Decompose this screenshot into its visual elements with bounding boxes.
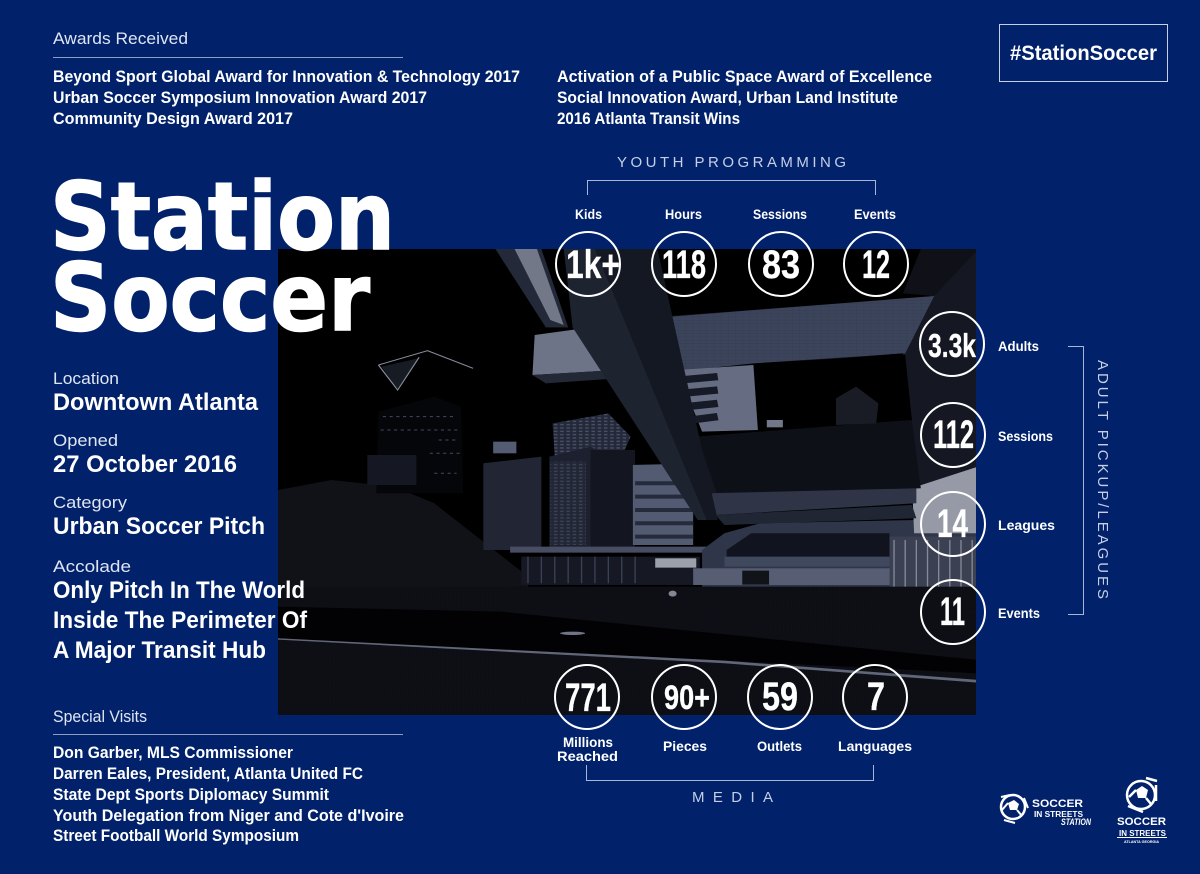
stat: kids bbox=[556, 206, 620, 296]
logo: Soccer in the Streets Station: IN STREETS bbox=[1034, 810, 1084, 819]
fact: accolade: Accolade bbox=[53, 558, 131, 576]
fact: location: Location bbox=[53, 370, 119, 388]
diagonal beam bbox=[590, 249, 718, 520]
media group bbox=[555, 665, 912, 806]
hashtag box bbox=[1000, 24, 1168, 82]
title: Soccer bbox=[50, 244, 371, 353]
stat: hours: 118 bbox=[662, 243, 706, 287]
logo: Soccer in the Streets bbox=[1117, 778, 1167, 844]
adult bracket bbox=[1068, 346, 1084, 614]
awards list: left column: Community Design Award 2017 bbox=[53, 110, 293, 128]
dark tower bbox=[376, 397, 463, 493]
stat: languages: 7 bbox=[867, 675, 885, 719]
awards list: right column bbox=[557, 68, 932, 128]
special visits list: Don Garber, MLS Commissioner bbox=[53, 744, 294, 762]
special visits list: Street Football World Symposium bbox=[53, 827, 299, 845]
fact: category: Category bbox=[53, 494, 128, 512]
logo: Soccer in the Streets: SOCCER bbox=[1117, 816, 1166, 828]
stat: sessions bbox=[749, 206, 813, 296]
logo: Soccer in the Streets: IN STREETS bbox=[1119, 829, 1167, 838]
fact: accolade bbox=[53, 558, 308, 664]
photo dimming bbox=[278, 249, 976, 715]
logo: Soccer in the Streets Station bbox=[1001, 795, 1091, 827]
special visits list: State Dept Sports Diplomacy Summit bbox=[53, 786, 329, 804]
stat: outlets bbox=[748, 665, 812, 754]
title: Station bbox=[50, 163, 395, 272]
canopy underside bbox=[662, 240, 978, 493]
stat: kids: 1k+ bbox=[566, 243, 620, 287]
right pavilion bbox=[702, 520, 976, 587]
stat: pieces: Pieces bbox=[663, 738, 707, 754]
fact: accolade: Inside The Perimeter Of bbox=[53, 607, 308, 634]
fact: opened bbox=[53, 432, 237, 478]
stat: leagues bbox=[921, 492, 1055, 556]
youth bracket bbox=[588, 180, 876, 195]
stat: leagues: 14 bbox=[937, 502, 969, 546]
stat: adults: Adults bbox=[998, 338, 1039, 354]
fact: accolade: Only Pitch In The World bbox=[53, 577, 305, 604]
photo: elevated station at night bbox=[278, 240, 978, 720]
stat: hours bbox=[652, 206, 716, 296]
stat: millions reached: 771 bbox=[565, 676, 611, 720]
fact: location bbox=[53, 370, 259, 416]
stat: kids: Kids bbox=[575, 206, 602, 222]
stat: pieces bbox=[652, 665, 716, 754]
awards heading: Awards Received bbox=[53, 30, 188, 48]
fact: category: Urban Soccer Pitch bbox=[53, 513, 265, 540]
fact: opened: 27 October 2016 bbox=[53, 451, 237, 478]
stat: millions reached bbox=[555, 665, 619, 764]
awards list: left column: Urban Soccer Symposium Innovation Award 2017 bbox=[53, 89, 427, 107]
youth programming group bbox=[556, 154, 908, 296]
awards list: right column: 2016 Atlanta Transit Wins bbox=[557, 110, 740, 128]
awards list: right column: Social Innovation Award, Urban Land Institute bbox=[557, 89, 898, 107]
tower crown bbox=[378, 351, 473, 390]
fact: category bbox=[53, 494, 265, 540]
adult heading: ADULT PICKUP/LEAGUES bbox=[1094, 360, 1111, 599]
stat: events: Events bbox=[854, 206, 896, 222]
awards list: left column: Beyond Sport Global Award for Innovation & Technology 2017 bbox=[53, 68, 520, 86]
stat: adult sessions bbox=[921, 403, 1053, 467]
logo: Soccer in the Streets: ATLANTA GEORGIA bbox=[1124, 839, 1159, 844]
stat: sessions: Sessions bbox=[753, 206, 807, 222]
title bbox=[50, 163, 395, 353]
stat: events bbox=[844, 206, 908, 296]
fact: accolade: A Major Transit Hub bbox=[53, 637, 266, 664]
hashtag box: #StationSoccer bbox=[1010, 42, 1157, 65]
stat: languages: Languages bbox=[838, 738, 912, 754]
stat: millions reached: Reached bbox=[557, 748, 618, 764]
media heading: MEDIA bbox=[692, 789, 773, 806]
stat: millions reached: Millions bbox=[563, 734, 613, 750]
fence and pitch wall bbox=[510, 547, 707, 553]
ground bbox=[278, 587, 978, 720]
special visits list bbox=[53, 744, 404, 845]
adult pickup and leagues group bbox=[920, 312, 1111, 644]
awards list: left column bbox=[53, 68, 520, 128]
stat: outlets: Outlets bbox=[757, 738, 802, 754]
media bracket bbox=[586, 765, 874, 780]
logo: Soccer in the Streets Station: SOCCER bbox=[1032, 798, 1083, 810]
stat: outlets: 59 bbox=[762, 675, 798, 719]
awards list: right column: Activation of a Public Space Award of Excellence bbox=[557, 68, 932, 86]
stat: adult events: Events bbox=[998, 605, 1040, 621]
fact: opened: Opened bbox=[53, 432, 118, 450]
stat: sessions: 83 bbox=[762, 243, 800, 287]
special visits list: Darren Eales, President, Atlanta United FC bbox=[53, 765, 363, 783]
hill bbox=[278, 480, 528, 590]
special visits heading: Special Visits bbox=[53, 708, 147, 726]
stat: adult events bbox=[921, 580, 1040, 644]
stat: adults bbox=[920, 312, 1039, 376]
stat: languages bbox=[838, 665, 912, 754]
youth heading: YOUTH PROGRAMMING bbox=[617, 154, 846, 171]
mid buildings bbox=[483, 457, 541, 550]
stat: adult sessions: Sessions bbox=[998, 428, 1053, 444]
stat: hours: Hours bbox=[665, 206, 702, 222]
stat: events: 12 bbox=[862, 243, 890, 287]
stat: leagues: Leagues bbox=[998, 517, 1055, 533]
stat: adult events: 11 bbox=[940, 590, 965, 634]
angled wedge bbox=[532, 330, 601, 375]
fact: location: Downtown Atlanta bbox=[53, 389, 259, 416]
window with distant building bbox=[834, 353, 904, 359]
stat: adults: 3.3k bbox=[928, 327, 976, 364]
stat: pieces: 90+ bbox=[664, 679, 710, 717]
special visits list: Youth Delegation from Niger and Cote d'Ivoire bbox=[53, 807, 404, 825]
apartment block bbox=[678, 365, 758, 432]
stat: adult sessions: 112 bbox=[933, 413, 974, 457]
logo: Soccer in the Streets Station: STATION bbox=[1061, 817, 1091, 827]
